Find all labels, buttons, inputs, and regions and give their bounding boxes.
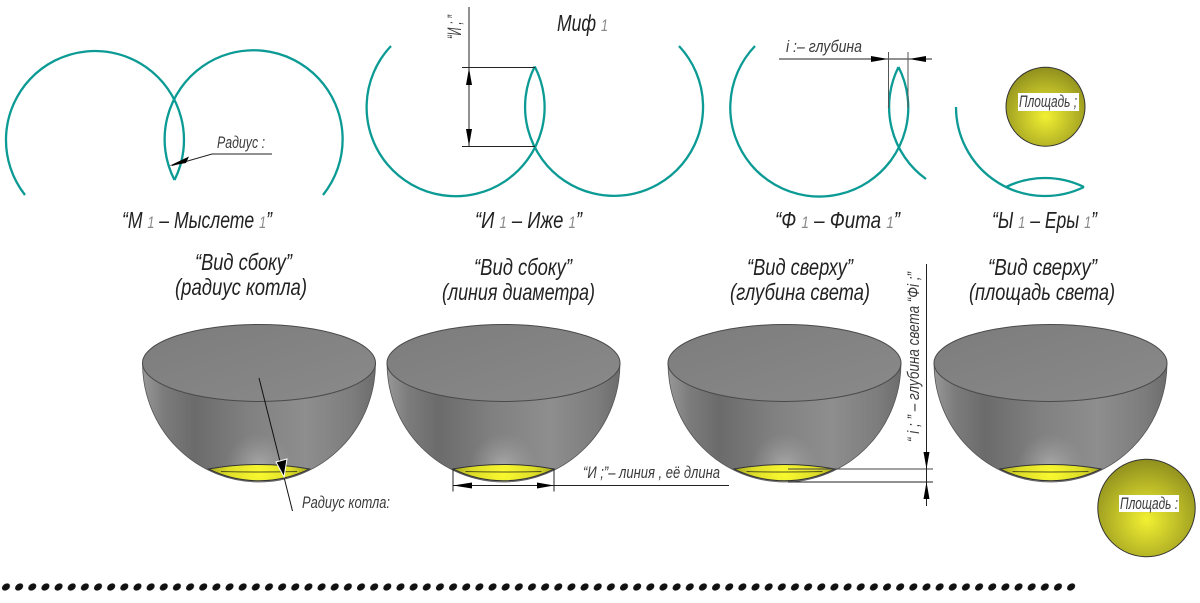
icon: large yellow area disc [1098, 459, 1195, 557]
arrow: boiler radius leader [259, 378, 292, 511]
bowl 2: diameter line [387, 324, 729, 492]
panel: И 1 – Иже 1 [367, 7, 703, 233]
heading: Вид сбоку, радиус котла [175, 249, 307, 300]
arrow: radius leader [169, 154, 272, 166]
panel: Ы 1 – Еры 1 [956, 67, 1098, 233]
caption: Ф 1 – Фита 1: “Ф 1 – Фита 1” [775, 207, 901, 233]
icon: yellow area disc: Площадь ; [1019, 92, 1077, 111]
label: Радиус котла: Радиус котла: [302, 493, 390, 512]
bowl 1: radius [142, 324, 390, 512]
diagram: circle and lens, depth [730, 46, 926, 197]
diagram: arc and lens [956, 107, 1084, 196]
dotted line [0, 580, 1078, 594]
dimension: chord length [453, 469, 729, 492]
label: И – линия, её длина: “И ;”– линия , её длина [583, 463, 720, 482]
panel: М 1 – Мыслете 1 [6, 50, 343, 233]
panel: Ф 1 – Фита 1 [730, 37, 932, 233]
heading: Вид сверху, площадь света [969, 254, 1115, 305]
heading: Вид сверху, глубина света: (глубина света) [730, 279, 870, 305]
dimension: depth i [779, 52, 932, 108]
heading: Вид сверху, площадь света: “Вид сверху” [988, 254, 1098, 280]
dimension: vertical chord И [462, 7, 535, 146]
icon: yellow area disc [1006, 67, 1085, 146]
diagram: two circles, chord line [367, 46, 703, 196]
title: Миф 1: Миф 1 [557, 10, 608, 36]
bowl 3: light depth [668, 264, 933, 506]
caption: М 1 – Мыслете 1: “М 1 – Мыслете 1” [122, 207, 273, 233]
label: i – глубина: i :– глубина [786, 37, 862, 56]
heading: Вид сбоку, линия диаметра: (линия диаметра) [442, 279, 595, 305]
caption: И 1 – Иже 1: “И 1 – Иже 1” [475, 207, 583, 233]
caption: Ы 1 – Еры 1: “Ы 1 – Еры 1” [992, 207, 1098, 233]
label: Радиус: Радиус : [217, 133, 265, 152]
bowl 4: light area [934, 324, 1167, 482]
dimension: depth of light [788, 264, 933, 506]
heading: Вид сверху, глубина света: “Вид сверху” [747, 254, 854, 280]
heading: Вид сбоку, линия диаметра [442, 254, 595, 305]
heading: Вид сбоку, радиус котла: (радиус котла) [175, 274, 307, 300]
diagram: two intersecting circles, radius [6, 50, 343, 195]
label: глубина света rotated: “ i ; ” – глубина света “Фi ;” [904, 271, 923, 442]
heading: Вид сверху, площадь света: (площадь света) [969, 279, 1115, 305]
heading: Вид сверху, глубина света [730, 254, 870, 305]
heading: Вид сбоку, радиус котла: “Вид сбоку” [195, 249, 293, 275]
heading: Вид сбоку, линия диаметра: “Вид сбоку” [474, 254, 573, 280]
